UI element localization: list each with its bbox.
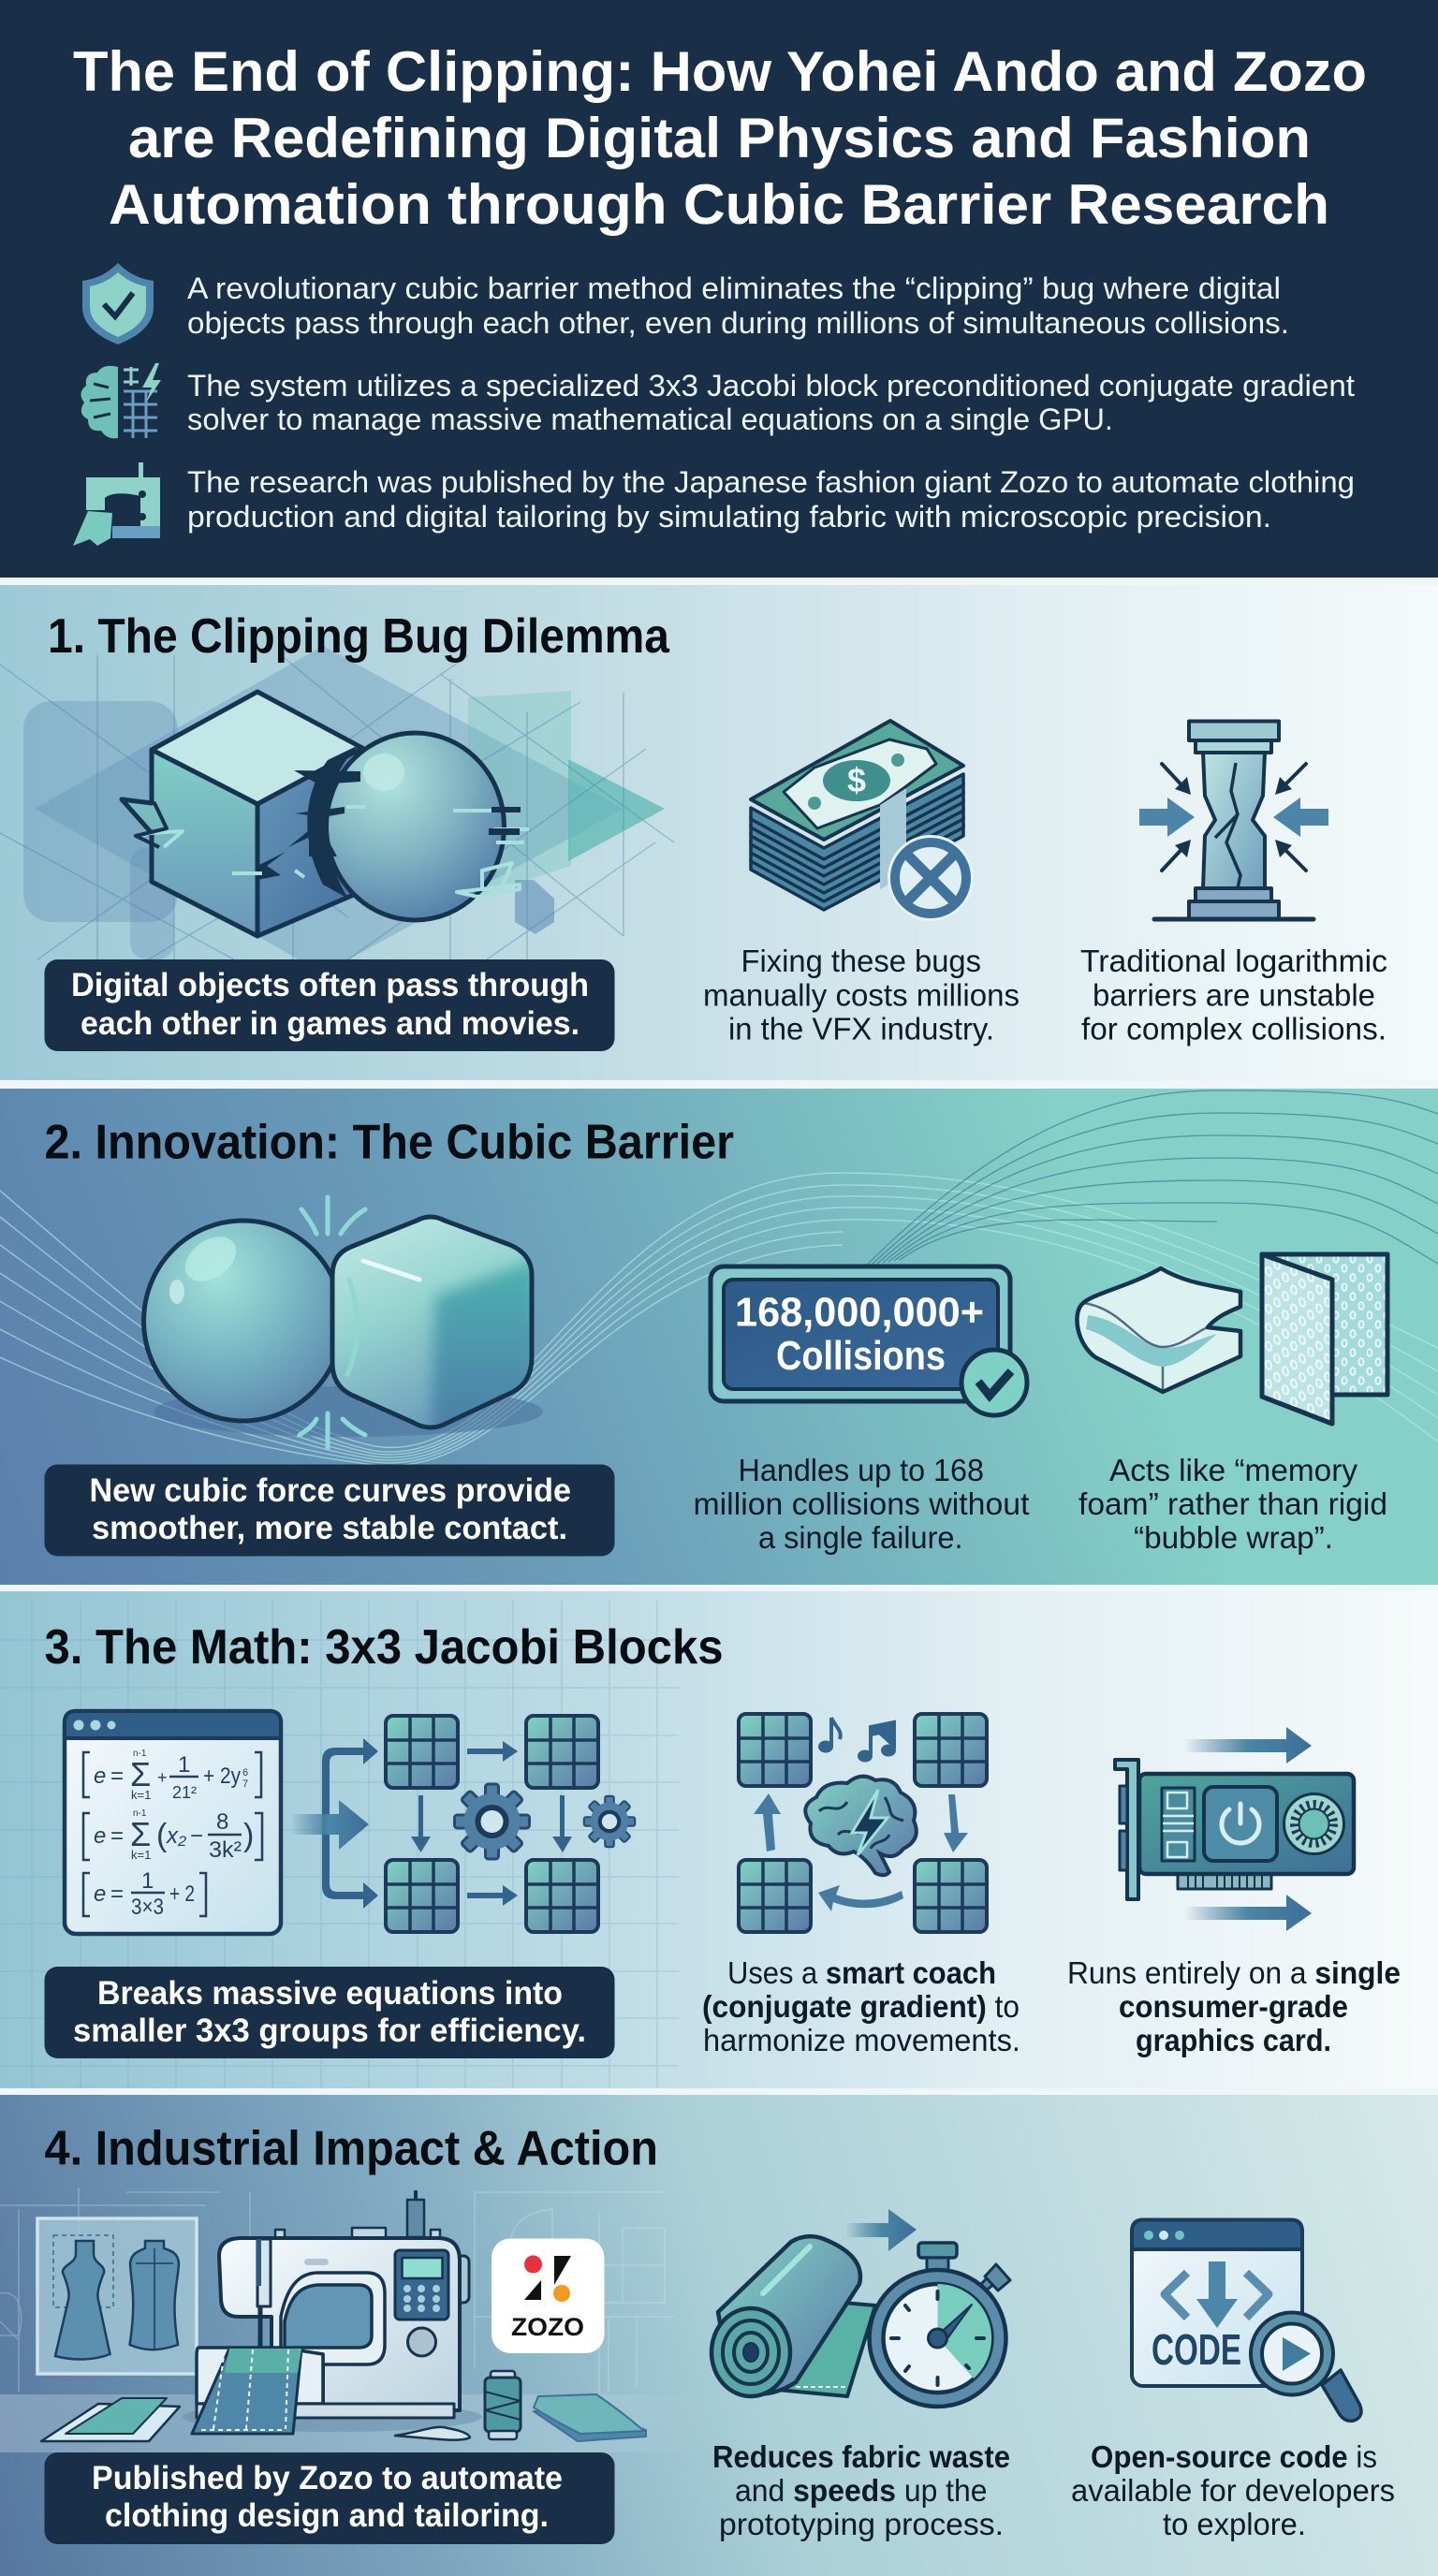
text: caption gpu: graphics card.	[1136, 2023, 1331, 2057]
illustration: equation window: =	[110, 1823, 124, 1849]
text: caption gpu: Runs entirely on a single	[1067, 1955, 1401, 1990]
icon: shield with check	[82, 263, 154, 344]
illustration: equation window	[65, 1711, 281, 1934]
text: bullet one	[187, 271, 1289, 340]
background wave lines	[0, 1090, 1438, 1466]
text: caption gpu	[1067, 1955, 1401, 2057]
panel: section 1 clipping bug	[0, 585, 1438, 1080]
text: caption fabric waste: prototyping process.	[719, 2507, 1004, 2541]
text: caption collisions	[693, 1453, 1030, 1555]
text: caption memory foam: Acts like “memory	[1109, 1453, 1357, 1487]
title: The End of Clipping: How Yohei Ando and Zozo	[73, 40, 1367, 103]
text: bullet three	[187, 465, 1355, 534]
text: bullet two	[187, 369, 1355, 436]
panel: section 3 jacobi blocks	[0, 1591, 1438, 2088]
text: caption memory foam: “bubble wrap”.	[1134, 1520, 1333, 1555]
callout: Digital objects often pass through	[71, 967, 589, 1003]
illustration: equation window: 8	[216, 1809, 228, 1835]
illustration: equation window: +	[157, 1768, 168, 1787]
text: caption collisions: million collisions without	[693, 1486, 1030, 1521]
panel: section 4 industrial impact	[0, 2095, 1438, 2576]
heading: 3. The Math: 3x3 Jacobi Blocks	[45, 1620, 723, 1675]
text: caption collisions: a single failure.	[758, 1520, 962, 1555]
illustration: equation window: 1	[141, 1868, 154, 1894]
illustration: equation window: −	[190, 1823, 203, 1849]
text: caption collisions: Handles up to 168	[738, 1453, 984, 1487]
text: caption cost: Fixing these bugs	[741, 944, 981, 978]
callout: smoother, more stable contact.	[92, 1510, 567, 1546]
illustration: equation window: n-1	[133, 1749, 147, 1759]
background drafting room	[0, 2188, 674, 2396]
illustration: cube and sphere clipping	[122, 692, 529, 936]
text: caption smart coach	[702, 1955, 1020, 2057]
illustration: equation window: + 2y	[203, 1764, 241, 1789]
text: caption open source: to explore.	[1163, 2507, 1306, 2541]
callout: New cubic force curves provide	[90, 1472, 571, 1509]
title	[73, 40, 1367, 236]
text: caption open source	[1071, 2439, 1395, 2541]
counter badge	[711, 1266, 1027, 1415]
text: caption memory foam	[1078, 1453, 1387, 1555]
table surface	[0, 2394, 712, 2452]
text: caption memory foam: foam” rather than rigid	[1078, 1486, 1387, 1521]
text: bullet three: The research was published by the Japanese fashion giant Zozo to automate clothing	[187, 465, 1355, 499]
illustration: soft sphere and cube	[144, 1197, 543, 1448]
illustration: equation window: 21²	[172, 1783, 197, 1802]
text: caption barriers: Traditional logarithmic	[1080, 944, 1387, 978]
text: caption barriers: for complex collisions.	[1081, 1011, 1387, 1046]
illustration: equation window: =	[110, 1764, 124, 1789]
illustration: dress pattern poster	[37, 2218, 197, 2374]
callout	[45, 1967, 614, 2058]
title: are Redefining Digital Physics and Fashion	[128, 107, 1311, 169]
icon: fabric roll and stopwatch	[712, 2209, 1010, 2407]
illustration: equation window: 6	[242, 1767, 248, 1778]
callout: clothing design and tailoring.	[105, 2497, 549, 2534]
text: bullet one: objects pass through each other, even during millions of simultaneous collisions.	[187, 306, 1289, 340]
callout	[45, 959, 614, 1051]
illustration: equation window: (	[156, 1818, 168, 1853]
illustration: equation window: =	[110, 1881, 124, 1907]
text: bullet two: solver to manage massive mathematical equations on a single GPU.	[187, 402, 1113, 436]
callout: each other in games and movies.	[81, 1005, 580, 1042]
icon: bubble wrap	[1262, 1254, 1387, 1424]
counter badge: 168,000,000+	[735, 1290, 984, 1335]
text: caption gpu: consumer-grade	[1119, 1989, 1348, 2024]
text: caption cost: in the VFX industry.	[728, 1011, 994, 1046]
heading: 1. The Clipping Bug Dilemma	[48, 609, 670, 664]
illustration: equation window: Σ	[130, 1815, 151, 1853]
icon: money stack with cross: $	[847, 761, 866, 799]
text: caption barriers	[1080, 944, 1387, 1046]
text: caption cost: manually costs millions	[703, 977, 1020, 1013]
icon: cracked column under pressure	[1139, 721, 1328, 919]
icon: money stack with cross	[751, 721, 963, 910]
callout: Published by Zozo to automate	[92, 2460, 563, 2496]
text: caption fabric waste	[712, 2439, 1010, 2541]
text: caption fabric waste: Reduces fabric waste	[712, 2439, 1010, 2474]
illustration: equation window: + 2	[169, 1881, 195, 1907]
background geometric shapes	[0, 646, 674, 973]
callout	[45, 2452, 614, 2544]
icon: sewing machine	[73, 462, 160, 546]
illustration: equation window: e	[94, 1764, 106, 1789]
illustration: equation window: 3k²	[209, 1837, 242, 1863]
callout	[45, 1464, 614, 1556]
text: bullet three: production and digital tailoring by simulating fabric with microscopic precision.	[187, 500, 1271, 534]
callout: Breaks massive equations into	[97, 1975, 563, 2012]
text: caption smart coach: (conjugate gradient) to	[702, 1989, 1020, 2024]
icon: code window with magnifier: CODE	[1152, 2325, 1241, 2374]
heading: 2. Innovation: The Cubic Barrier	[45, 1116, 734, 1170]
icon: brain and grid	[81, 363, 161, 438]
illustration: equation window: Σ	[130, 1755, 151, 1793]
text: caption smart coach: Uses a smart coach	[727, 1955, 996, 1990]
illustration: paper pattern	[41, 2398, 180, 2441]
callout: smaller 3x3 groups for efficiency.	[73, 2012, 586, 2049]
illustration: equation window: x₂	[166, 1823, 186, 1849]
illustration: equation window: n-1	[133, 1808, 147, 1819]
text: caption open source: Open-source code is	[1091, 2439, 1377, 2474]
text: bullet two: The system utilizes a specialized 3x3 Jacobi block preconditioned conjugate gradient	[187, 369, 1355, 402]
illustration: equation window: 3×3	[131, 1895, 164, 1920]
illustration: equation window: k=1	[131, 1788, 151, 1802]
illustration: equation window: e	[94, 1881, 106, 1907]
illustration: chalk, spool and fabric	[395, 2371, 646, 2441]
arrow: split to blocks	[290, 1738, 378, 1909]
icon: graphics card	[1115, 1727, 1354, 1931]
panel: section 2 cubic barrier	[0, 1089, 1438, 1585]
background grid lines	[0, 1601, 679, 2088]
logo: zozo: ZOZO	[511, 2313, 584, 2341]
text: caption smart coach: harmonize movements.	[703, 2023, 1020, 2057]
counter badge: Collisions	[776, 1333, 946, 1379]
illustration: equation window: k=1	[131, 1848, 151, 1862]
text: caption fabric waste: and speeds up the	[735, 2473, 987, 2508]
text: bullet one: A revolutionary cubic barrier method eliminates the “clipping” bug where digital	[187, 271, 1281, 305]
icon: cross badge	[888, 835, 974, 921]
icon: memory foam	[1077, 1268, 1240, 1392]
illustration: sewing machine	[183, 2190, 482, 2434]
panel: header	[0, 0, 1438, 578]
text: caption cost	[703, 944, 1020, 1046]
illustration: equation window: )	[243, 1818, 254, 1853]
logo: zozo	[492, 2239, 605, 2353]
text: caption barriers: barriers are unstable	[1093, 977, 1375, 1013]
illustration: equation window: 7	[242, 1778, 248, 1790]
illustration: equation window: 1	[178, 1752, 190, 1778]
heading: 4. Industrial Impact & Action	[45, 2121, 658, 2175]
blocks and gears diagram	[386, 1716, 635, 1932]
icon: brain coach with blocks	[739, 1714, 987, 1932]
text: caption open source: available for developers	[1071, 2473, 1395, 2508]
title: Automation through Cubic Barrier Research	[109, 173, 1329, 236]
icon: code window with magnifier	[1132, 2220, 1361, 2421]
illustration: equation window: e	[94, 1823, 106, 1849]
